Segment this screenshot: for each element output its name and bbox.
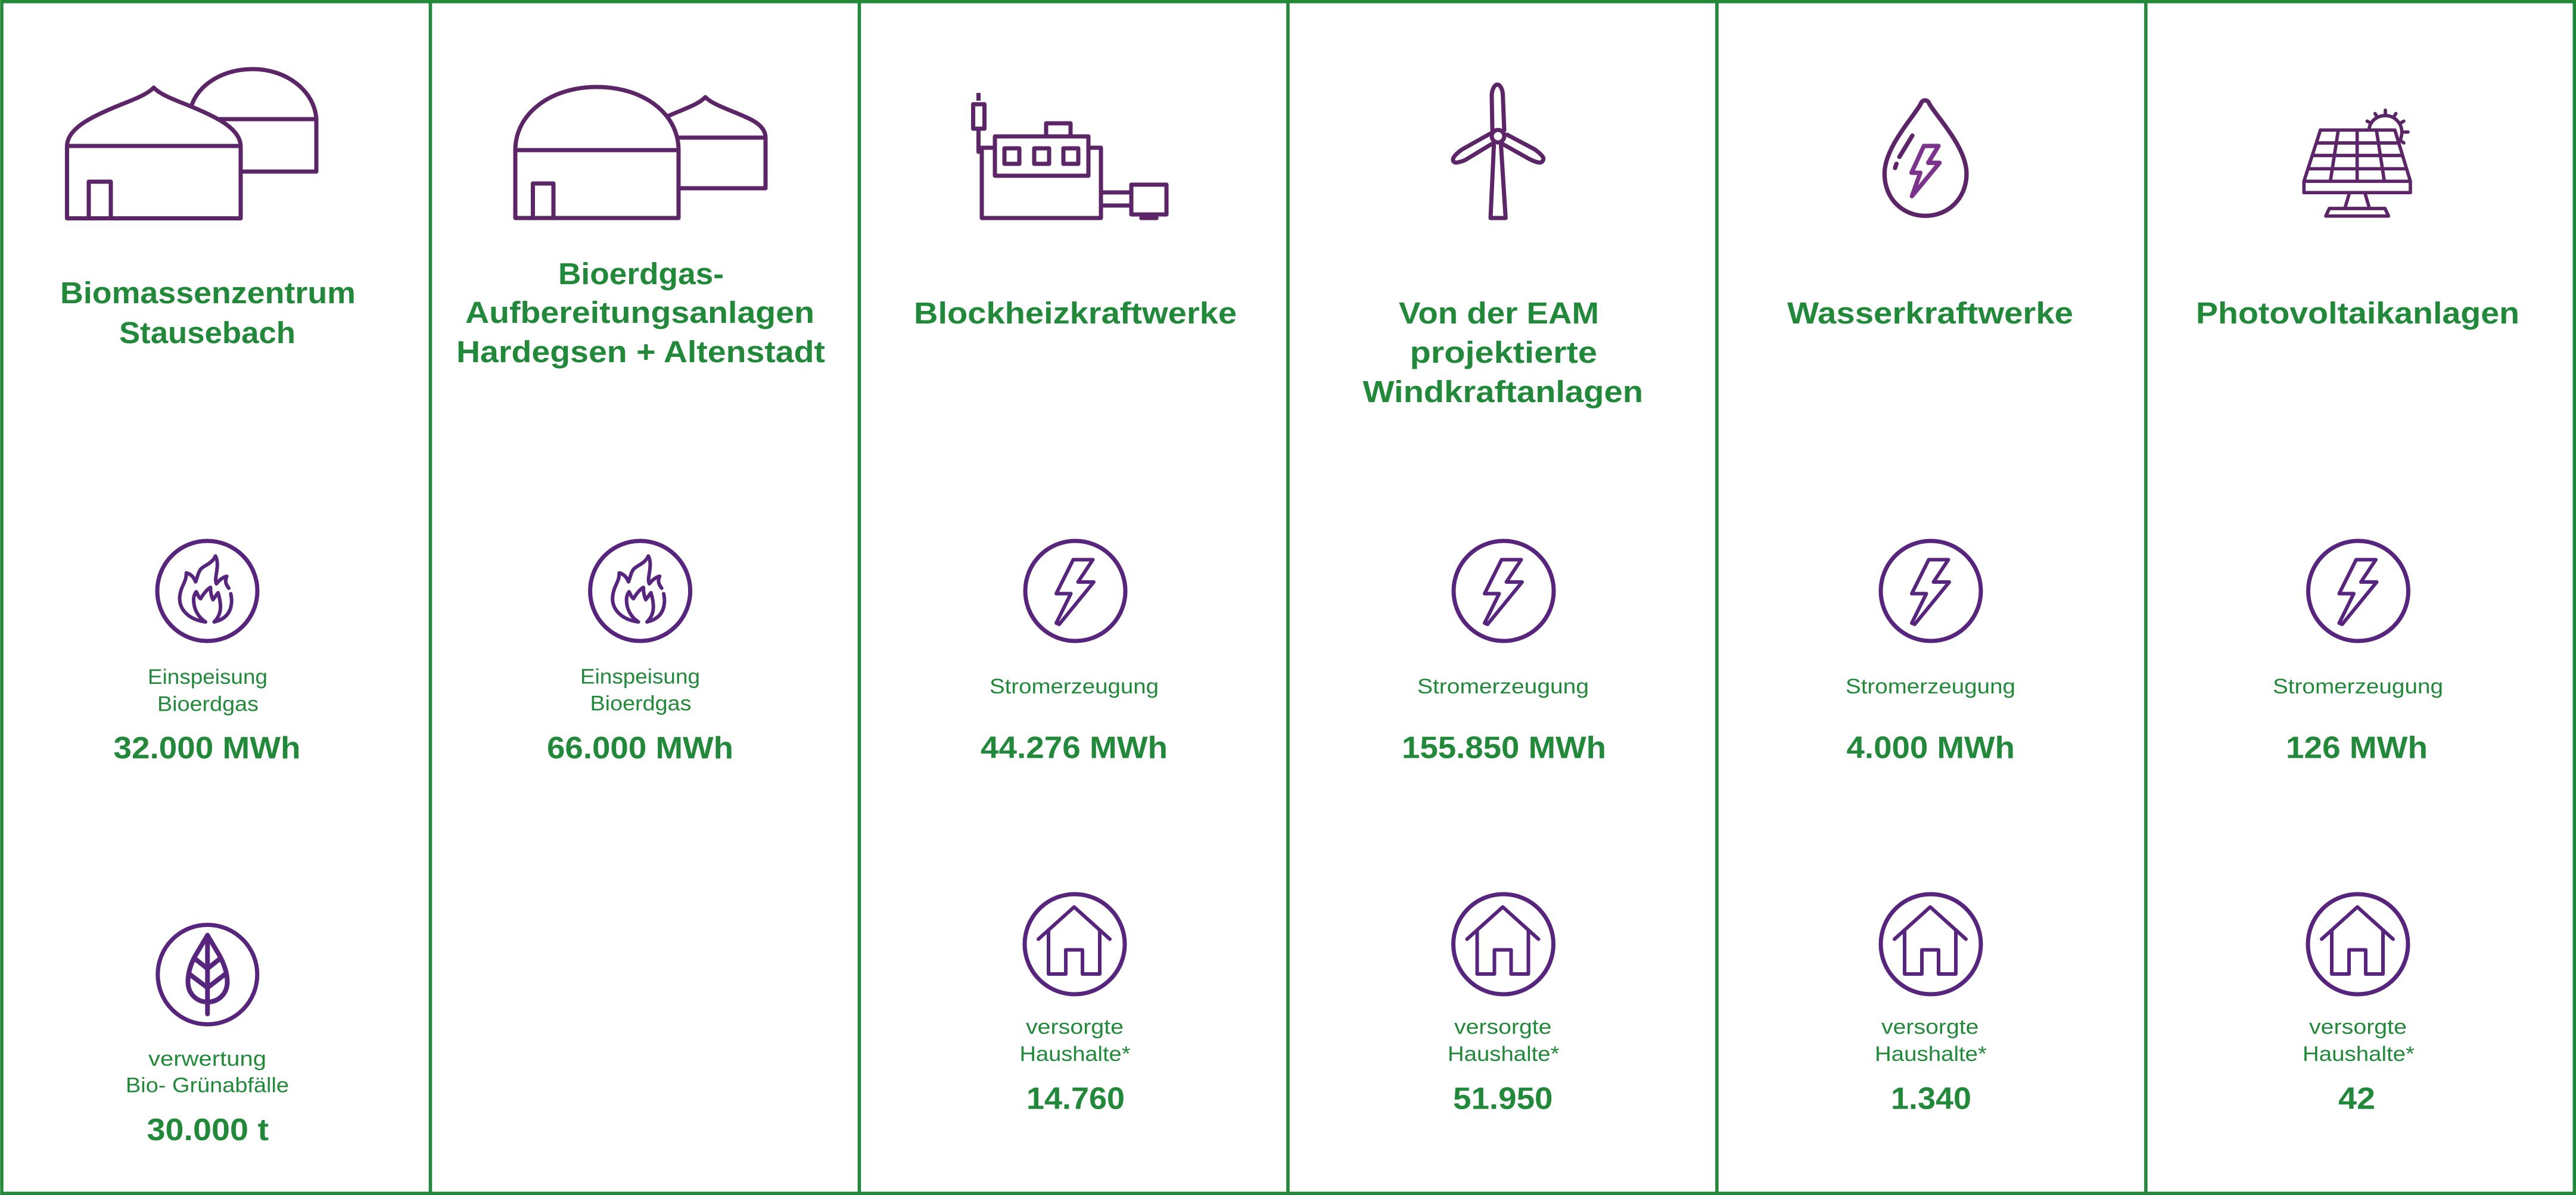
label: versorgte bbox=[1026, 1015, 1124, 1039]
label: Einspeisung bbox=[580, 665, 700, 689]
label bbox=[1875, 1015, 1987, 1066]
heading: Von der EAM bbox=[1399, 296, 1599, 330]
value: 32.000 MWh bbox=[113, 731, 300, 765]
value: 14.760 bbox=[1026, 1082, 1125, 1116]
value: 4.000 MWh bbox=[1847, 730, 2015, 765]
panel: Bioerdgas-Aufbereitungsanlagen bbox=[430, 2, 859, 1193]
value: 42 bbox=[2338, 1082, 2375, 1116]
icon: house in circle bbox=[1025, 894, 1125, 994]
heading bbox=[60, 276, 356, 350]
heading: projektierte bbox=[1410, 335, 1597, 369]
label bbox=[126, 1047, 289, 1097]
label: Bio- Grünabfälle bbox=[126, 1073, 289, 1097]
label bbox=[2303, 1015, 2415, 1066]
label: Haushalte* bbox=[1448, 1042, 1560, 1066]
heading: Blockheizkraftwerke bbox=[914, 296, 1237, 330]
label: verwertung bbox=[148, 1047, 266, 1070]
icon: leaf in circle bbox=[158, 925, 257, 1025]
heading: Wasserkraftwerke bbox=[1787, 296, 2073, 330]
label: Stromerzeugung bbox=[1846, 675, 2015, 698]
label: Stromerzeugung bbox=[2273, 675, 2443, 698]
panel: Wasserkraftwerke bbox=[1717, 2, 2146, 1193]
icon: combined heat and power plant bbox=[973, 93, 1166, 219]
icon: flame in circle bbox=[157, 541, 257, 641]
icon: house in circle bbox=[1881, 894, 1981, 994]
icon: lightning bolt in circle bbox=[1025, 541, 1125, 641]
value: 30.000 t bbox=[147, 1113, 269, 1147]
icon: biomass domes bbox=[67, 69, 316, 218]
panel: Blockheizkraftwerke bbox=[859, 2, 1288, 1193]
label: versorgte bbox=[2309, 1015, 2407, 1039]
icon: lightning bolt in circle bbox=[1454, 541, 1554, 641]
label bbox=[1020, 1015, 1131, 1066]
panel: Photovoltaikanlagen bbox=[2146, 2, 2574, 1193]
value: 126 MWh bbox=[2286, 730, 2428, 765]
panel: Biomassenzentrum Stausebach bbox=[2, 2, 430, 1193]
label: Stromerzeugung bbox=[1417, 675, 1589, 698]
icon: water drop with bolt bbox=[1884, 100, 1967, 216]
heading: Hardegsen + Altenstadt bbox=[456, 335, 825, 369]
icon: lightning bolt in circle bbox=[2308, 541, 2408, 641]
label: Einspeisung bbox=[148, 665, 267, 689]
value: 44.276 MWh bbox=[981, 730, 1168, 765]
icon: house in circle bbox=[1454, 894, 1554, 994]
value: 51.950 bbox=[1453, 1082, 1553, 1116]
label bbox=[580, 665, 700, 715]
icon: biogas domes bbox=[515, 87, 766, 218]
label: Bioerdgas bbox=[590, 692, 691, 715]
value: 66.000 MWh bbox=[547, 731, 733, 765]
label: Haushalte* bbox=[2303, 1042, 2415, 1066]
heading: Stausebach bbox=[119, 316, 295, 350]
label: versorgte bbox=[1454, 1015, 1551, 1039]
label: Stromerzeugung bbox=[990, 675, 1159, 698]
icon: lightning bolt in circle bbox=[1881, 541, 1981, 641]
icon: wind turbine bbox=[1453, 85, 1544, 218]
heading bbox=[456, 257, 825, 369]
label: Haushalte* bbox=[1020, 1042, 1131, 1066]
label: Bioerdgas bbox=[157, 692, 259, 716]
label bbox=[1448, 1015, 1560, 1066]
value: 155.850 MWh bbox=[1402, 730, 1606, 765]
icon: flame in circle bbox=[590, 541, 690, 641]
heading: Bioerdgas- bbox=[558, 257, 724, 291]
heading: Photovoltaikanlagen bbox=[2196, 296, 2519, 330]
value: 1.340 bbox=[1891, 1082, 1971, 1116]
icon: house in circle bbox=[2308, 894, 2408, 994]
heading: Aufbereitungsanlagen bbox=[465, 295, 814, 329]
label: Haushalte* bbox=[1875, 1042, 1987, 1066]
label: versorgte bbox=[1881, 1015, 1979, 1039]
heading: Windkraftanlagen bbox=[1363, 375, 1643, 409]
heading: Biomassenzentrum bbox=[60, 276, 356, 310]
heading bbox=[1363, 296, 1643, 409]
icon: solar panel with sun bbox=[2304, 110, 2410, 216]
panel: Von der EAM projektierte Windkraftanlagen bbox=[1288, 2, 1717, 1193]
label bbox=[148, 665, 267, 716]
